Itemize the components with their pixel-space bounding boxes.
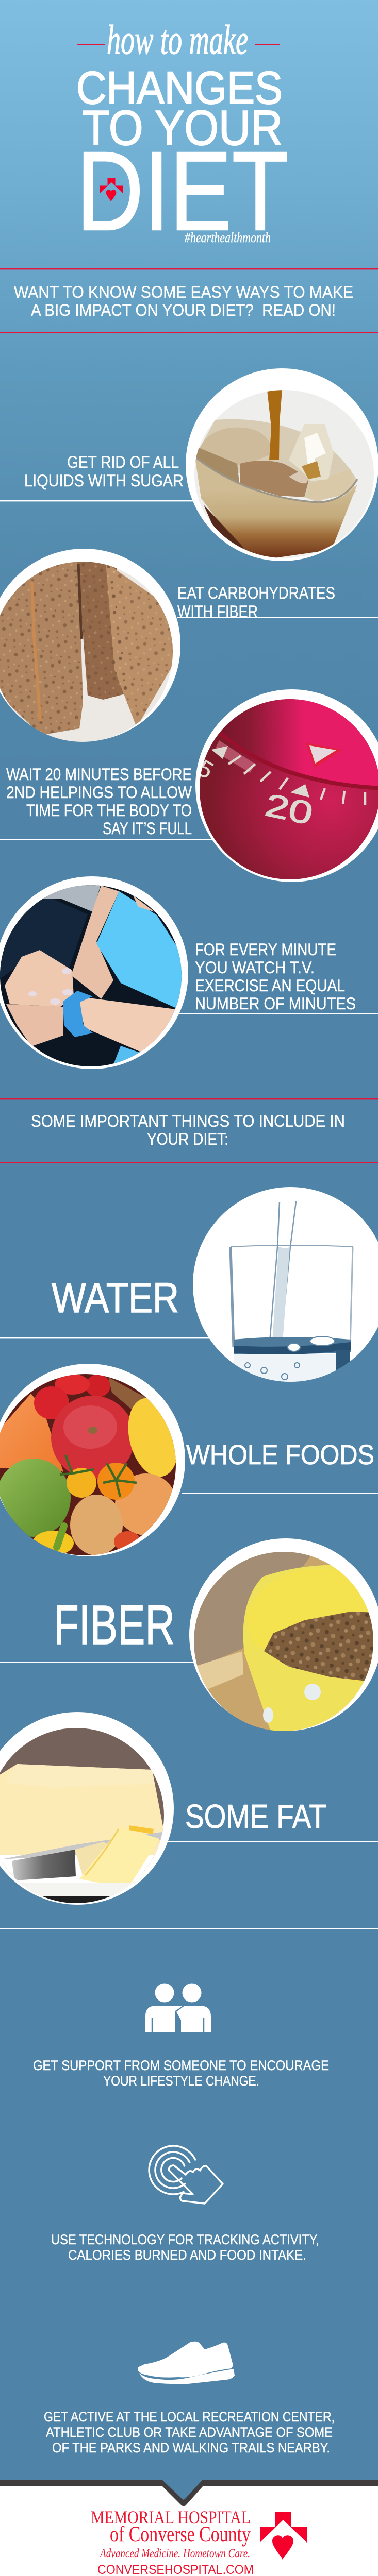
title script line: how to make: how to make bbox=[107, 18, 248, 63]
icon: hospital mark in the D bbox=[100, 178, 123, 201]
text: liquids with sugar bbox=[24, 453, 184, 490]
photo: soda glass bbox=[186, 368, 378, 564]
photo: granola bowl and bread bbox=[189, 1538, 378, 1736]
text: carbohydrates with fiber: EAT CARBOHYDRATES bbox=[177, 584, 335, 602]
dial number: 20 bbox=[262, 787, 316, 832]
text: wait 20 minutes bbox=[6, 765, 192, 838]
panel: support bbox=[33, 1984, 329, 2089]
text: exercise while watching tv: YOU WATCH T.V. bbox=[195, 958, 315, 977]
photo: butter on knife bbox=[0, 1712, 174, 1911]
text: technology bbox=[51, 2232, 319, 2263]
section heading text: YOUR DIET: bbox=[147, 1130, 228, 1148]
panel: technology bbox=[51, 2146, 319, 2263]
section heading text bbox=[31, 1112, 345, 1148]
dial number: 5 bbox=[193, 754, 218, 784]
hospital name: Advanced Medicine. Hometown Care. bbox=[99, 2547, 250, 2561]
text: liquids with sugar: LIQUIDS WITH SUGAR bbox=[24, 471, 184, 490]
photo: glass of water bbox=[193, 1187, 378, 1385]
text: carbohydrates with fiber bbox=[177, 584, 335, 621]
panel: some fat bbox=[0, 1712, 378, 1911]
hospital name: MEMORIAL HOSPITAL bbox=[91, 2507, 251, 2528]
title line: DIET: DIET bbox=[76, 129, 289, 254]
photo: fruit and vegetables bbox=[0, 1364, 186, 1558]
text: exercise while watching tv: FOR EVERY MINUTE bbox=[195, 940, 336, 959]
text: wait 20 minutes: WAIT 20 MINUTES BEFORE bbox=[6, 765, 192, 784]
text: technology: USE TECHNOLOGY FOR TRACKING ACTIVITY, bbox=[51, 2232, 319, 2247]
text: exercise while watching tv: NUMBER OF MINUTES bbox=[195, 994, 356, 1013]
panel: liquids with sugar bbox=[0, 368, 378, 564]
intro text: A BIG IMPACT ON YOUR DIET? READ ON! bbox=[31, 301, 336, 319]
text: support: YOUR LIFESTYLE CHANGE. bbox=[103, 2073, 259, 2089]
title line: TO YOUR: TO YOUR bbox=[83, 100, 283, 156]
panel: exercise while watching tv bbox=[0, 876, 378, 1069]
title block bbox=[76, 18, 289, 254]
text: support: GET SUPPORT FROM SOMEONE TO ENCOURAGE bbox=[33, 2058, 329, 2073]
intro text: WANT TO KNOW SOME EASY WAYS TO MAKE bbox=[14, 283, 353, 301]
title line: CHANGES: CHANGES bbox=[76, 62, 283, 113]
footer bar with arrow bbox=[0, 2479, 378, 2506]
photo: red kitchen timer bbox=[193, 689, 378, 886]
panel: whole foods bbox=[0, 1364, 378, 1558]
text: carbohydrates with fiber: WITH FIBER bbox=[177, 602, 258, 621]
hospital name bbox=[91, 2507, 251, 2561]
intro band bbox=[0, 268, 378, 333]
intro text bbox=[14, 283, 353, 319]
text: wait 20 minutes: TIME FOR THE BODY TO bbox=[26, 801, 192, 820]
icon: two people bbox=[145, 1984, 211, 2032]
text: get active bbox=[44, 2409, 335, 2455]
panel: get active bbox=[44, 2342, 335, 2455]
heading: some fat: SOME FAT bbox=[185, 1798, 326, 1835]
photo: whole grain bread bbox=[0, 549, 186, 744]
text: technology: CALORIES BURNED AND FOOD INTAKE. bbox=[68, 2247, 306, 2263]
icon: running shoe bbox=[138, 2342, 235, 2384]
icon: touch gesture hand bbox=[149, 2146, 223, 2204]
section heading band bbox=[0, 1098, 378, 1163]
heading: fiber: FIBER bbox=[54, 1594, 175, 1656]
text: wait 20 minutes: 2ND HELPINGS TO ALLOW bbox=[6, 783, 192, 802]
panel: fiber bbox=[0, 1538, 378, 1736]
section heading text: SOME IMPORTANT THINGS TO INCLUDE IN bbox=[31, 1112, 345, 1130]
text: get active: ATHLETIC CLUB OR TAKE ADVANTAGE OF SOME bbox=[46, 2425, 333, 2440]
text: liquids with sugar: GET RID OF ALL bbox=[67, 453, 179, 471]
text: wait 20 minutes: SAY IT’S FULL bbox=[103, 819, 192, 838]
text: get active: GET ACTIVE AT THE LOCAL RECREATION CENTER, bbox=[44, 2409, 335, 2425]
icon: hospital logo bbox=[260, 2512, 307, 2560]
text: exercise while watching tv bbox=[195, 940, 356, 1013]
text: support bbox=[33, 2058, 329, 2089]
photo: woman checking fitness band bbox=[0, 876, 188, 1069]
text: get active: OF THE PARKS AND WALKING TRAILS NEARBY. bbox=[52, 2440, 330, 2455]
footer bbox=[0, 2479, 378, 2576]
heading: water: WATER bbox=[52, 1275, 179, 1321]
panel: wait 20 minutes bbox=[0, 689, 378, 886]
panel: carbohydrates with fiber bbox=[0, 549, 378, 744]
text: exercise while watching tv: EXERCISE AN EQUAL bbox=[195, 976, 345, 995]
hospital name: of Converse County bbox=[110, 2522, 251, 2547]
panel: water bbox=[0, 1187, 378, 1385]
hashtag: #hearthealthmonth bbox=[185, 230, 271, 245]
